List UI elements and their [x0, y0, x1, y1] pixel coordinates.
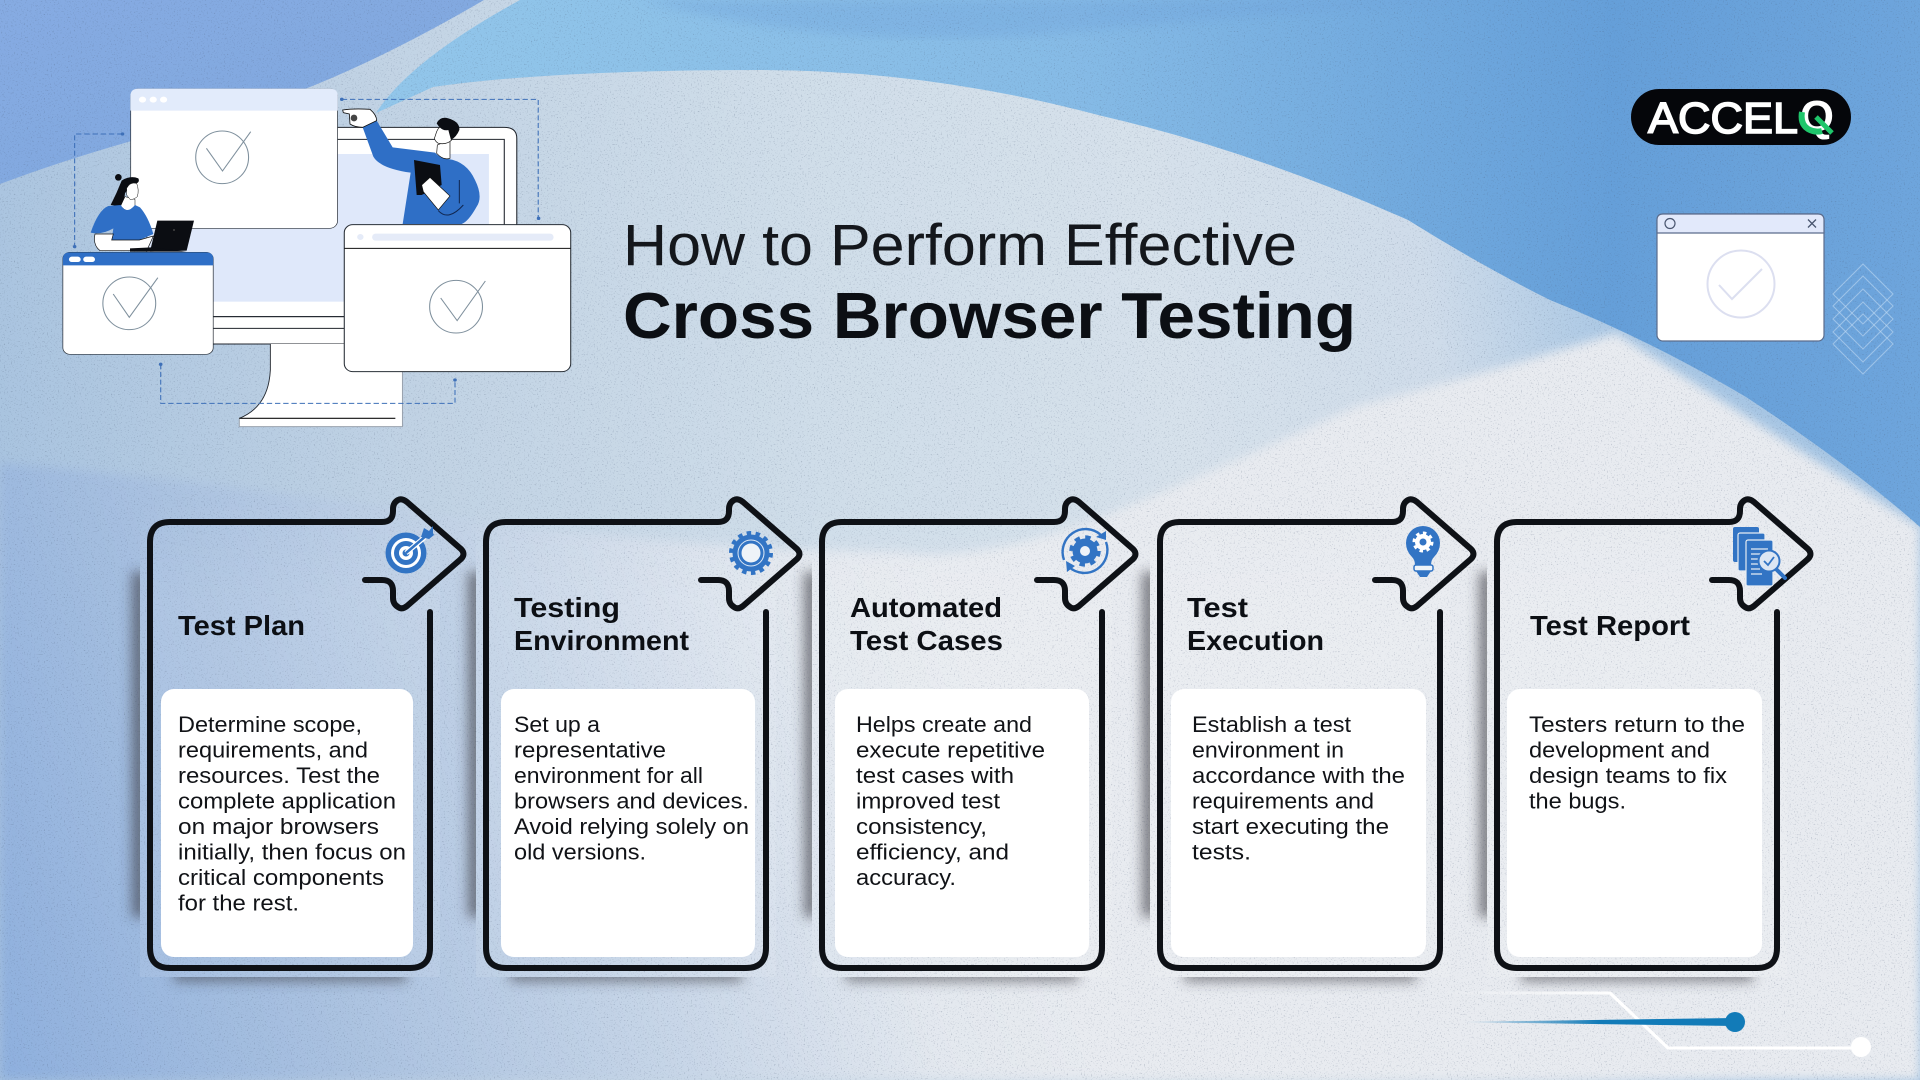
text block: Test Plan description: for the rest.: [178, 890, 299, 916]
dashed connectors: [75, 99, 538, 403]
text block: Test Execution description: accordance with the: [1192, 763, 1405, 788]
text block: Test Report description: the bugs.: [1529, 788, 1626, 814]
text block: Test Plan description: Determine scope,: [178, 712, 362, 737]
heading: Automated Test Cases: [850, 592, 1003, 656]
text block: Test Plan description: requirements, and: [178, 738, 368, 762]
text block: Automated Test Cases description: Helps create and: [856, 712, 1032, 737]
heading: Test Execution: Execution: [1187, 625, 1324, 656]
text block: Test Plan description: initially, then focus on: [178, 840, 406, 864]
decorative diamonds: [1833, 264, 1893, 374]
illustration: people testing browsers on a monitor: [63, 89, 571, 427]
window: bottom right browser: [344, 225, 571, 372]
text block: Testing Environment description: browsers and devices.: [514, 788, 749, 814]
panel: Test Execution: [1160, 499, 1474, 968]
title: [623, 213, 1356, 352]
window: top browser: [130, 89, 338, 228]
text block: Test Execution description: environment in: [1192, 738, 1344, 762]
text block: Test Report description: design teams to fix: [1529, 763, 1727, 788]
text block: Automated Test Cases description: consistency,: [856, 814, 987, 839]
text block: Automated Test Cases description: efficiency, and: [856, 840, 1009, 864]
panel: Test Report: [1497, 499, 1810, 968]
title: How to Perform Effective: [623, 213, 1297, 278]
decorative browser window, top right: [1657, 214, 1824, 341]
text block: Testing Environment description: old versions.: [514, 840, 646, 864]
text block: Automated Test Cases description: execute repetitive: [856, 738, 1045, 762]
text block: Test Execution description: Establish a test: [1192, 712, 1351, 737]
text block: Test Execution description: [1192, 712, 1405, 864]
text block: Test Plan description: on major browsers: [178, 814, 379, 839]
heading: Test Execution: [1187, 592, 1324, 656]
panel: Automated Test Cases: [822, 499, 1136, 968]
figure: woman with laptop: [91, 174, 194, 252]
text block: Test Plan description: [178, 712, 406, 916]
icon: target: [386, 526, 434, 574]
text block: Test Report description: [1529, 712, 1745, 814]
text block: Automated Test Cases description: accuracy.: [856, 865, 956, 890]
translucent card backings: [140, 500, 1787, 977]
icon: light bulb with gear: [1406, 526, 1440, 577]
panel: Test Plan: [150, 499, 464, 968]
figure: man with tablet: [343, 109, 480, 224]
text block: Testing Environment description: representative: [514, 738, 666, 762]
text block: Test Plan description: complete application: [178, 788, 396, 814]
text block: Testing Environment description: [514, 712, 749, 864]
text block: Automated Test Cases description: [856, 712, 1045, 890]
text block: Test Report description: development and: [1529, 738, 1710, 762]
heading: Testing Environment: Testing: [514, 592, 620, 623]
logo: ACCELQ: ACCEL: [1648, 94, 1798, 143]
text block: Testing Environment description: Set up a: [514, 712, 601, 737]
panel: Testing Environment: [486, 499, 800, 968]
icon: monitor: [147, 127, 517, 427]
text block: Testing Environment description: environment for all: [514, 763, 703, 788]
heading: Testing Environment: [514, 592, 689, 656]
text block: Automated Test Cases description: test cases with: [856, 763, 1014, 788]
icon: documents with magnifier: [1733, 527, 1785, 586]
heading: Testing Environment: Environment: [514, 625, 689, 656]
icon: gear with rotating arrows: [1063, 529, 1107, 573]
decorative connector lines with nodes: [1443, 993, 1871, 1057]
text block: Test Plan description: critical components: [178, 865, 384, 890]
text block: Test Execution description: start executing the: [1192, 814, 1389, 839]
heading: Automated Test Cases: Test Cases: [850, 625, 1003, 656]
text block: Test Plan description: resources. Test the: [178, 763, 380, 788]
heading: Test Execution: Test: [1187, 592, 1248, 623]
heading: Test Report: Test Report: [1530, 610, 1690, 641]
logo: ACCELQ: [1631, 89, 1851, 145]
window: left browser with blue header: [63, 252, 213, 354]
icon: gear: [732, 534, 770, 572]
text block: Test Execution description: tests.: [1192, 840, 1251, 864]
text block: Testing Environment description: Avoid relying solely on: [514, 814, 749, 839]
text block: Test Report description: Testers return to the: [1529, 712, 1745, 737]
heading: Automated Test Cases: Automated: [850, 592, 1002, 623]
text block: Automated Test Cases description: improved test: [856, 788, 1000, 814]
text block: Test Execution description: requirements and: [1192, 788, 1374, 814]
heading: Test Plan: Test Plan: [178, 610, 305, 641]
title: Cross Browser Testing: [623, 279, 1356, 352]
card shadows: [132, 572, 1753, 981]
logo: ACCELQ: Q: [1800, 92, 1834, 141]
